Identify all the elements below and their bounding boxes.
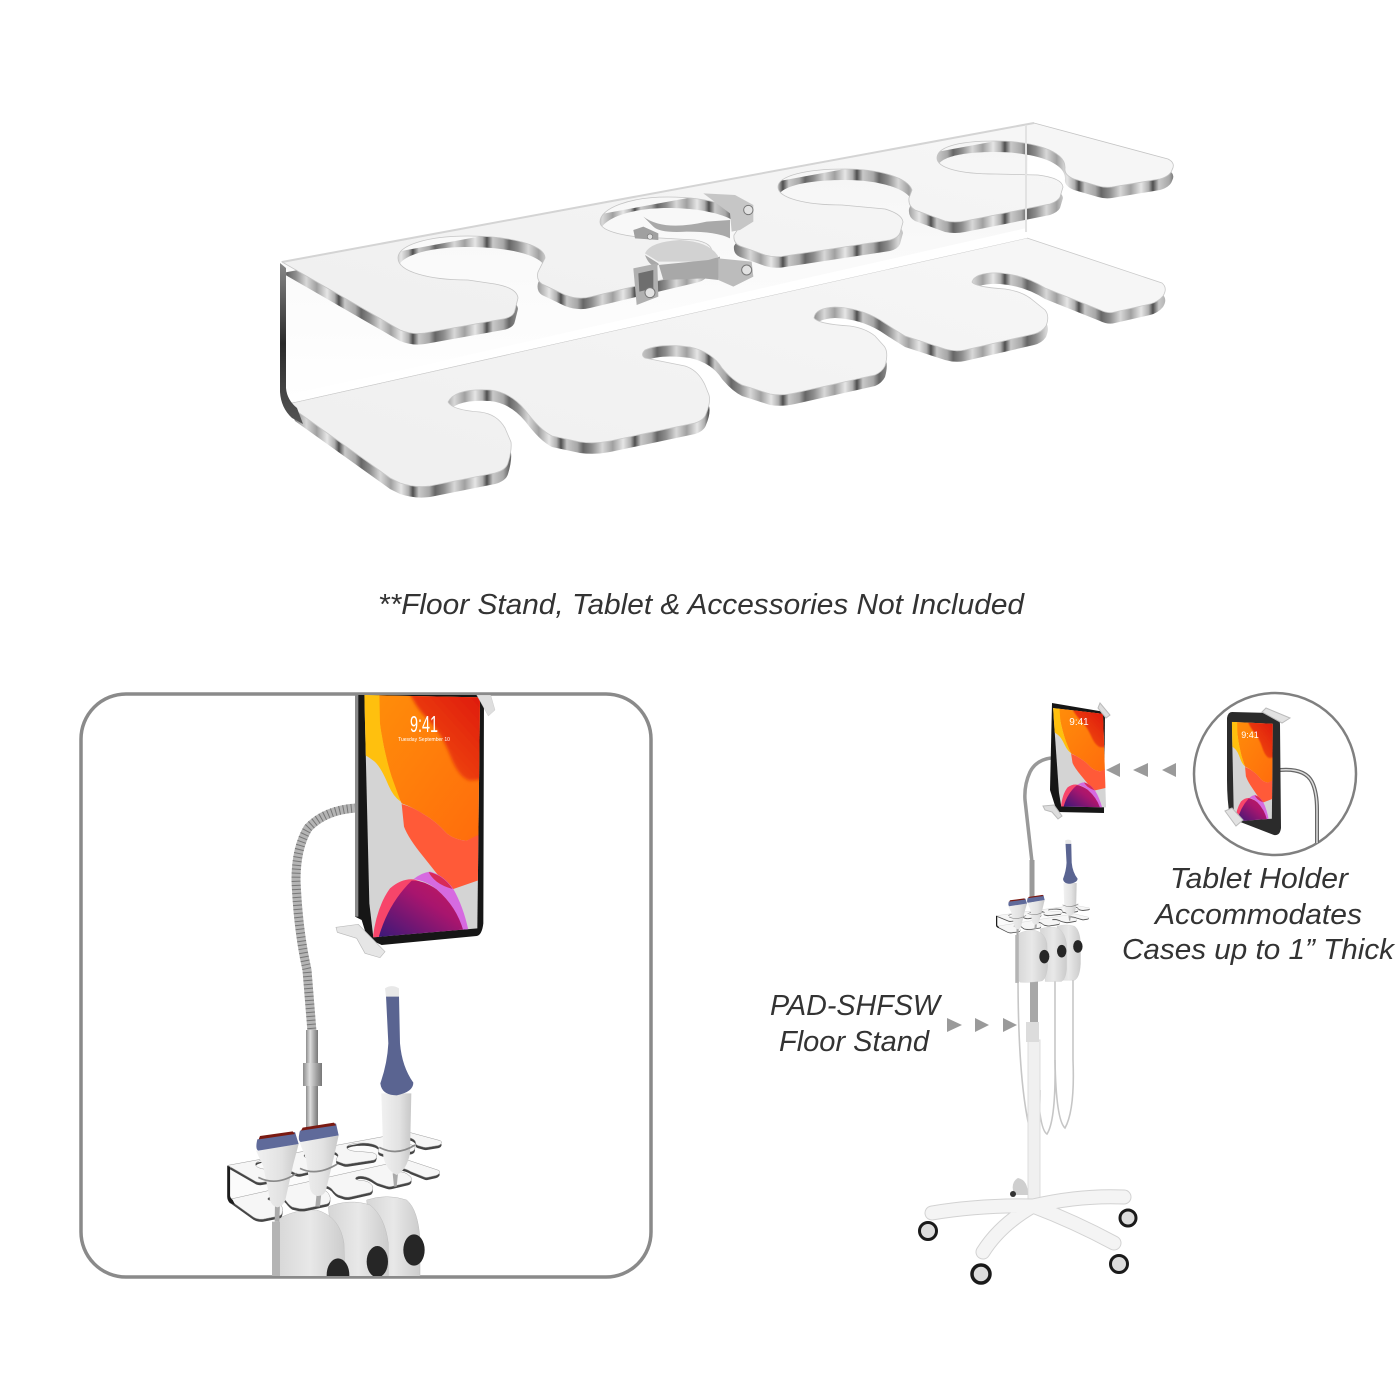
- arrows pointing to floor stand: [947, 1018, 1017, 1032]
- label: tablet holder: [1122, 863, 1396, 966]
- lock-screen time: 9:41: [410, 711, 438, 737]
- lock-screen date: Tuesday September 10: [398, 737, 450, 743]
- inset tablet in case: [1225, 708, 1290, 835]
- casters: [920, 1191, 1136, 1283]
- small tablet: [1043, 703, 1112, 819]
- label: floor stand: PAD-SHFSW: [770, 990, 943, 1022]
- small gooseneck: [1025, 758, 1051, 905]
- arrows pointing to tablet: [1106, 763, 1176, 777]
- label: tablet holder: Cases up to 1” Thick: [1122, 934, 1396, 966]
- inset neck: [1280, 770, 1317, 843]
- floor stand illustration: [920, 703, 1136, 1283]
- panel frame: [81, 694, 651, 1277]
- label: tablet holder: Accommodates: [1153, 899, 1362, 931]
- label: floor stand: [770, 990, 943, 1058]
- metal mounting bracket: [633, 193, 753, 305]
- caption: not included note: **Floor Stand, Tablet & Accessories Not Included: [378, 589, 1025, 621]
- pole: [1026, 975, 1040, 1205]
- arm sleeve and collar: [303, 1030, 322, 1128]
- five-star base: [932, 1178, 1124, 1252]
- product photo: acrylic probe holder: [280, 123, 1173, 498]
- label: tablet holder: Tablet Holder: [1170, 863, 1349, 895]
- cables: [1018, 975, 1073, 1138]
- label: floor stand: Floor Stand: [779, 1026, 930, 1058]
- small rig: [996, 840, 1090, 983]
- tablet: [336, 690, 495, 958]
- units, tray and probes: [227, 986, 442, 1276]
- panel: close-up of tablet and probes on stand: [81, 690, 651, 1340]
- gooseneck arm: [296, 808, 356, 1032]
- small tablet time: 9:41: [1069, 717, 1089, 728]
- inset circle: tablet holder with case: [1194, 693, 1356, 855]
- panel contents: [227, 695, 496, 1276]
- inset tablet time: 9:41: [1241, 730, 1259, 740]
